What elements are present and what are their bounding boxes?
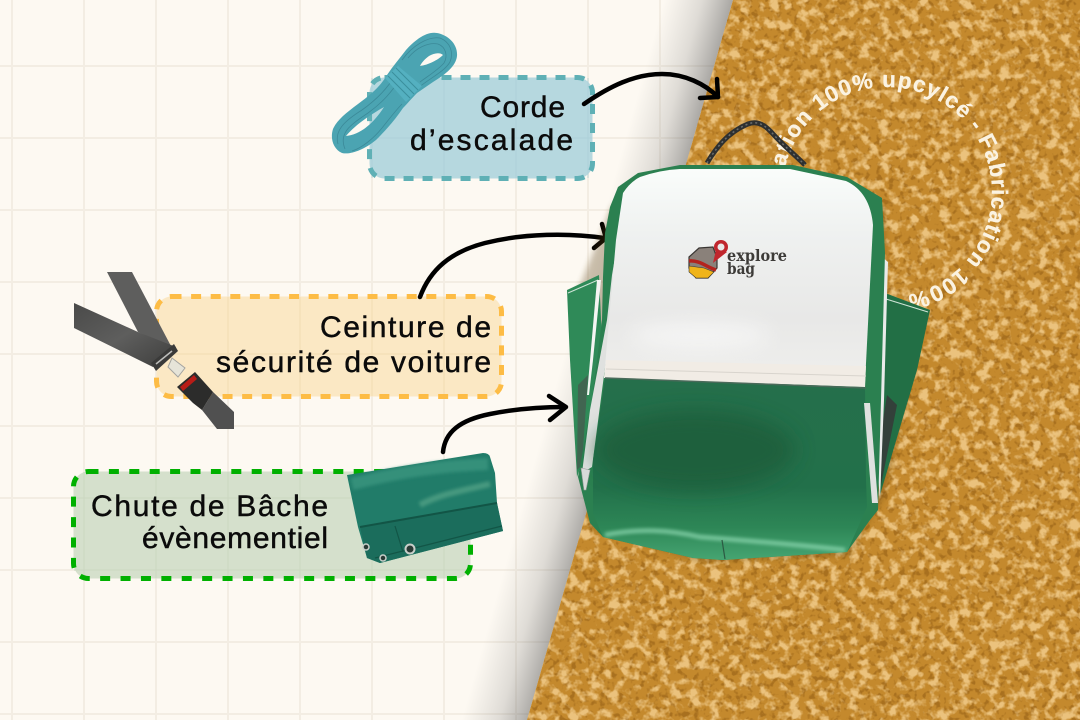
logo: explore bag: bag bbox=[727, 259, 755, 278]
left side pocket bbox=[567, 275, 602, 477]
icon: rolled green tarp bbox=[347, 453, 503, 563]
label: chute de bâche: évènementiel bbox=[142, 522, 328, 555]
arrow: rope to backpack bbox=[584, 74, 718, 104]
cork board panel bbox=[527, 0, 1080, 720]
left thin zipper line bbox=[587, 280, 601, 395]
icon: seat belt bbox=[74, 272, 234, 429]
label: ceinture de sécurité: sécurité de voiture bbox=[216, 346, 491, 379]
left zipper strip bbox=[582, 240, 618, 473]
bottom seam bbox=[722, 540, 725, 559]
label: ceinture de sécurité: Ceinture de bbox=[320, 311, 491, 344]
bag shadow bbox=[574, 205, 926, 562]
zipper band bbox=[604, 360, 866, 388]
arrow: belt to backpack bbox=[420, 224, 606, 297]
right side pocket bbox=[880, 293, 930, 495]
handle bbox=[707, 123, 805, 165]
circular slogan text: ation 100% upcylcé - Fabrication 100% bbox=[774, 72, 1008, 306]
white upper panel bbox=[604, 169, 873, 383]
label: ceinture de sécurité bbox=[156, 296, 502, 396]
label: corde d'escalade: d’escalade bbox=[410, 124, 573, 157]
label: chute de bâche: Chute de Bâche bbox=[91, 490, 328, 523]
label: chute de bâche bbox=[74, 472, 470, 578]
backpack bbox=[567, 123, 930, 562]
zipper pull bbox=[581, 468, 590, 490]
label: corde d'escalade bbox=[370, 78, 592, 178]
logo: explore bag: explore bbox=[727, 246, 787, 265]
icon: climbing rope bbox=[332, 33, 457, 153]
body green outline bbox=[578, 165, 885, 560]
shadow of the cork board on the paper bbox=[454, 0, 733, 720]
logo: explore bag bbox=[689, 240, 787, 278]
right white sliver bbox=[875, 255, 888, 500]
arrow: tarp to backpack bbox=[443, 396, 566, 452]
green lower panel bbox=[593, 378, 867, 560]
right zipper bbox=[864, 403, 878, 503]
label: corde d'escalade: Corde bbox=[480, 91, 565, 124]
